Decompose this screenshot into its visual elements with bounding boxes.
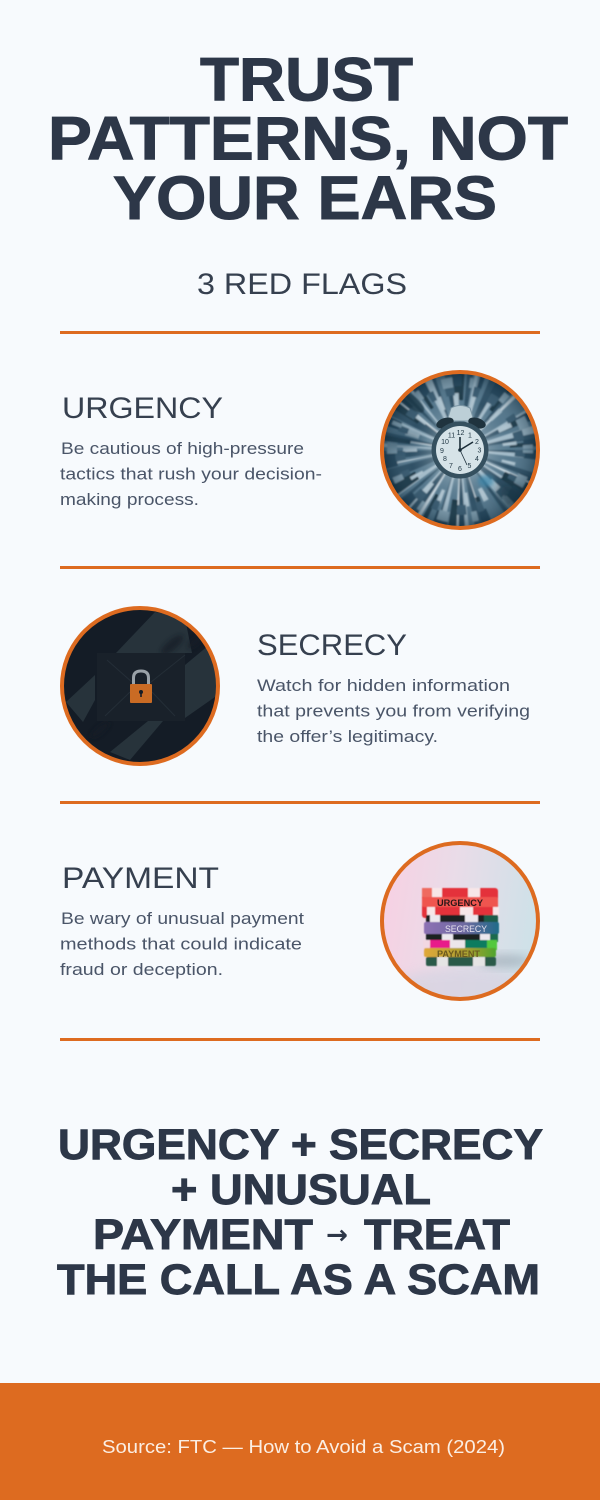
text block: payment description: fraud or deception. xyxy=(60,961,223,979)
source line: Source: FTC — How to Avoid a Scam (2024) xyxy=(102,1437,505,1457)
callout: conclusion xyxy=(57,1121,543,1304)
clock face: 3 xyxy=(478,448,482,454)
callout: conclusion: TREAT xyxy=(364,1211,510,1259)
chip labels: PAYMENT xyxy=(437,949,480,960)
text block: secrecy description xyxy=(257,677,530,746)
clock face: 9 xyxy=(440,448,444,455)
text block: secrecy description: that prevents you from verifying xyxy=(257,702,530,720)
text block: payment description: methods that could indicate xyxy=(60,936,302,954)
black and purple chips xyxy=(425,914,485,941)
text block: payment description: Be wary of unusual payment xyxy=(61,910,304,928)
icon: stack of poker chips photo xyxy=(380,841,540,1001)
clock face: 12 xyxy=(457,430,464,437)
envelope xyxy=(97,653,185,721)
clock face: 7 xyxy=(449,463,453,470)
callout: conclusion: URGENCY + SECRECY xyxy=(58,1121,543,1169)
text block: payment description xyxy=(60,910,304,979)
icon: padlock on envelope photo xyxy=(60,606,225,766)
title: PATTERNS, NOT xyxy=(48,104,568,172)
text block: secrecy description: the offer’s legitimacy. xyxy=(257,728,438,746)
padlock xyxy=(130,671,152,703)
clock face: 6 xyxy=(458,466,462,473)
clock face: 10 xyxy=(441,439,449,446)
clock face: 1 xyxy=(468,432,472,440)
subtitle: 3 red flags: 3 RED FLAGS xyxy=(197,268,407,301)
text block: urgency description: tactics that rush your decision- xyxy=(60,466,322,484)
clock face xyxy=(432,422,488,478)
icon: alarm clock photo xyxy=(380,370,540,530)
arrow: → xyxy=(326,1220,348,1250)
text block: urgency description: making process. xyxy=(60,491,199,509)
clock bells xyxy=(435,415,487,431)
clock face: 5 xyxy=(468,463,472,470)
chip labels: URGENCY xyxy=(437,898,484,909)
red chips xyxy=(422,888,498,918)
callout: conclusion: + UNUSUAL xyxy=(171,1166,431,1214)
title xyxy=(48,46,568,232)
panel: urgency xyxy=(60,370,540,530)
heading: urgency: URGENCY xyxy=(62,392,223,425)
title: YOUR EARS xyxy=(113,164,497,232)
clock face: 11 xyxy=(448,432,455,440)
clock face: 8 xyxy=(443,456,447,463)
clock face: 4 xyxy=(475,456,479,463)
chip labels xyxy=(437,898,488,960)
text block: secrecy description: Watch for hidden information xyxy=(257,677,510,695)
footer xyxy=(0,1383,600,1500)
colourful chips xyxy=(464,939,488,949)
panel: payment xyxy=(60,841,540,1001)
text block: urgency description xyxy=(60,440,322,509)
heading: payment: PAYMENT xyxy=(62,862,219,895)
title: TRUST xyxy=(200,46,413,114)
clock face: 2 xyxy=(475,439,479,446)
callout: conclusion: THE CALL AS A SCAM xyxy=(57,1256,540,1304)
callout: conclusion: PAYMENT xyxy=(93,1211,313,1259)
heading: secrecy: SECRECY xyxy=(257,629,407,662)
clock handle xyxy=(447,406,474,421)
chip labels: SECRECY xyxy=(445,924,488,935)
text block: urgency description: Be cautious of high-pressure xyxy=(61,440,304,458)
panel: secrecy xyxy=(60,606,530,766)
